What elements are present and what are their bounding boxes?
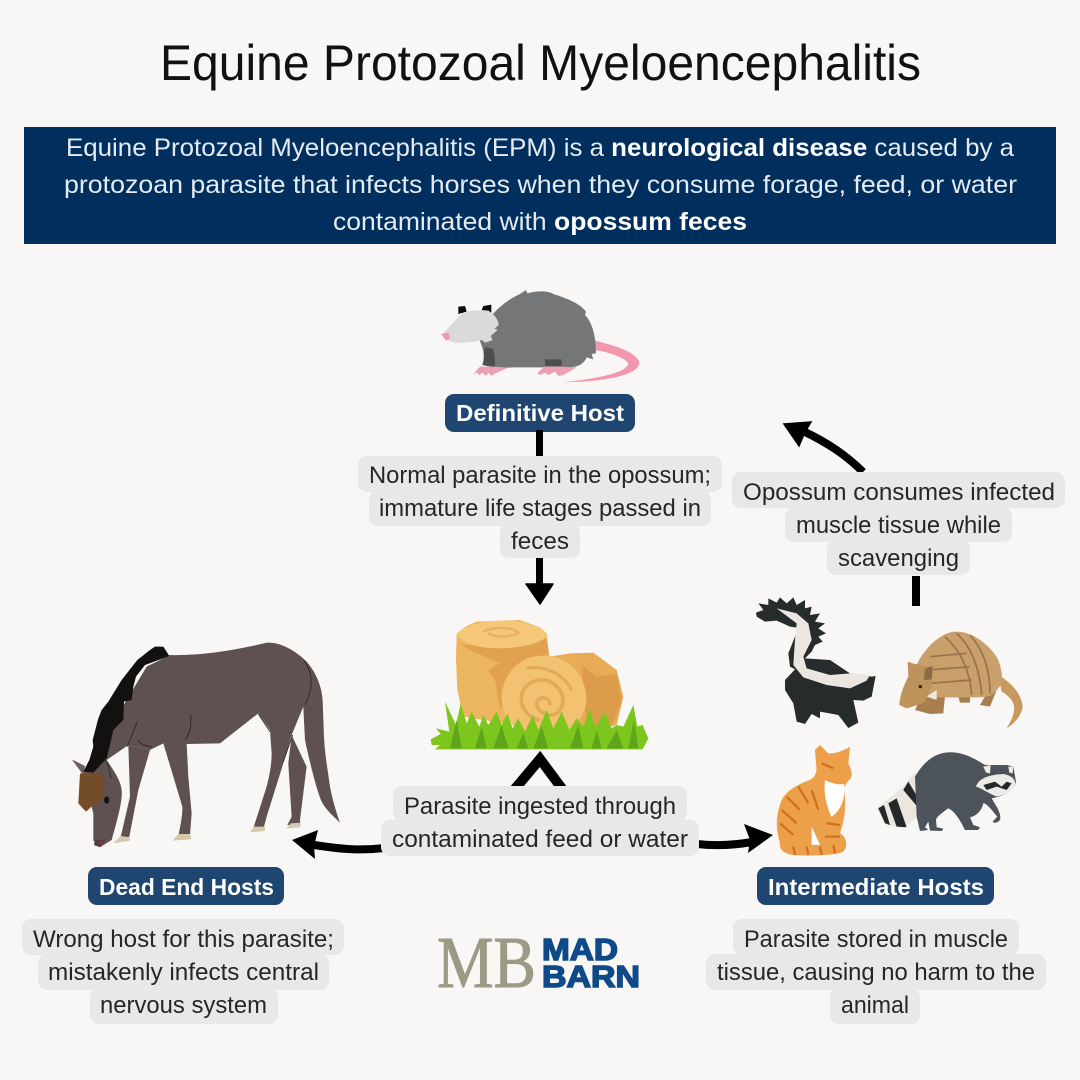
icon: cat: [777, 745, 852, 856]
text: dead end hosts description: mistakenly infects central: [48, 959, 319, 986]
logo: Mad Barn: MB: [437, 922, 536, 1003]
text: opossum consumes description: scavenging: [838, 545, 959, 572]
text: definitive host description: immature life stages passed in: [379, 495, 701, 522]
icon: armadillo: [899, 632, 1023, 728]
logo: Mad Barn: [437, 922, 640, 1003]
text: parasite ingested description: [381, 786, 699, 856]
text: dead end hosts description: [22, 919, 344, 1024]
icon: hay bales: [431, 620, 648, 749]
text: opossum consumes description: Opossum consumes infected: [743, 479, 1055, 506]
text: intermediate hosts description: tissue, causing no harm to the: [717, 959, 1035, 986]
logo: Mad Barn: BARN: [542, 959, 640, 994]
text: parasite ingested description: contaminated feed or water: [392, 826, 688, 853]
panel: introduction banner: protozoan parasite that infects horses when they consume forage, feed, or water: [64, 171, 1017, 199]
arrow: up to hay: [514, 759, 563, 790]
text: opossum consumes description: [732, 472, 1065, 575]
icon: raccoon: [877, 752, 1016, 831]
logo: Mad Barn: MAD: [542, 932, 618, 967]
arrow: intermediate hosts to opossum: [784, 422, 920, 606]
text: definitive host description: [358, 456, 722, 558]
icon: skunk: [756, 597, 876, 728]
arrow: definitive host to hay: [526, 430, 553, 604]
title: Equine Protozoal Myeloencephalitis: [160, 35, 921, 91]
label: intermediate hosts: [757, 867, 994, 905]
text: intermediate hosts description: Parasite stored in muscle: [744, 926, 1008, 953]
label: dead end hosts: Dead End Hosts: [99, 874, 274, 900]
label: definitive host: Definitive Host: [456, 400, 624, 426]
label: dead end hosts: [88, 867, 284, 905]
icon: horse: [72, 643, 340, 847]
label: definitive host: [445, 394, 635, 432]
text: definitive host description: Normal parasite in the opossum;: [369, 462, 711, 489]
panel: introduction banner: [24, 127, 1056, 244]
panel: introduction banner: contaminated with opossum feces: [333, 208, 747, 236]
text: intermediate hosts description: [706, 919, 1046, 1024]
text: dead end hosts description: Wrong host for this parasite;: [33, 926, 334, 953]
label: intermediate hosts: Intermediate Hosts: [768, 874, 984, 900]
icon: opossum: [441, 290, 639, 382]
text: opossum consumes description: muscle tissue while: [796, 512, 1001, 539]
arrow: ingestion to intermediate hosts: [697, 824, 773, 853]
text: definitive host description: feces: [511, 528, 569, 555]
arrow: ingestion to dead end hosts: [292, 830, 384, 859]
text: dead end hosts description: nervous system: [100, 992, 267, 1019]
text: intermediate hosts description: animal: [841, 992, 909, 1019]
panel: introduction banner: Equine Protozoal Myeloencephalitis (EPM) is a neurological disease caused by a: [66, 134, 1014, 162]
text: parasite ingested description: Parasite ingested through: [404, 793, 676, 820]
